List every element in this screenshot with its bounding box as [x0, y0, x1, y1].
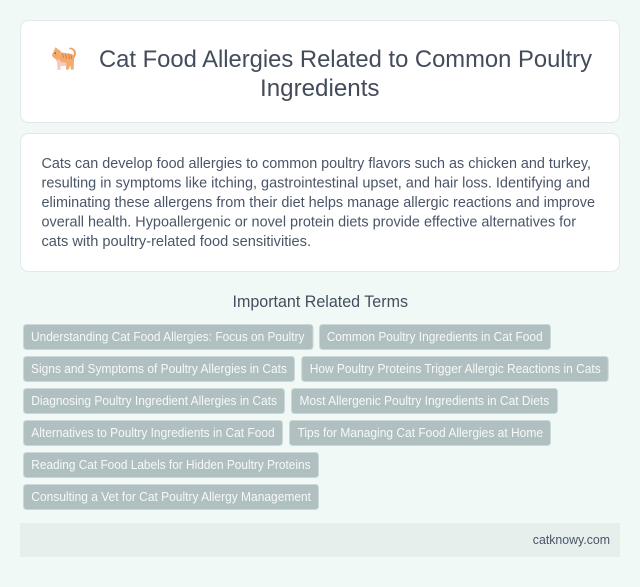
tag [292, 388, 558, 414]
tag: Tips for Managing Cat Food Allergies at Home [298, 426, 543, 440]
tag [320, 324, 550, 350]
text block: description: eliminating these allergens from their diet helps manage allergic reactions and improve [42, 195, 595, 211]
tag: Understanding Cat Food Allergies: Focus on Poultry [31, 330, 305, 344]
title: Cat Food Allergies Related to Common Poultry [99, 46, 593, 73]
tag [24, 356, 294, 382]
footer [20, 523, 620, 557]
tag [24, 324, 313, 350]
tag [24, 388, 284, 414]
tag: How Poultry Proteins Trigger Allergic Reactions in Cats [310, 362, 601, 376]
tag: Most Allergenic Poultry Ingredients in Cat Diets [300, 394, 549, 408]
text block: description: Cats can develop food allergies to common poultry flavors such as chicken and turkey, [42, 156, 591, 172]
panel: related term tags [24, 324, 608, 510]
tag [302, 356, 608, 382]
tag: Diagnosing Poultry Ingredient Allergies in Cats [31, 394, 277, 408]
text block: description: cats with poultry-related food sensitivities. [42, 234, 311, 250]
footer source text: catknowy.com [533, 532, 610, 547]
tag: Reading Cat Food Labels for Hidden Poultry Proteins [31, 458, 311, 472]
tag [24, 484, 318, 510]
tag: Signs and Symptoms of Poultry Allergies in Cats [31, 362, 287, 376]
panel: title card [20, 20, 620, 122]
tag [290, 420, 550, 446]
text block: description: overall health. Hypoallergenic or novel protein diets provide effective alternatives for [42, 214, 576, 230]
tag: Alternatives to Poultry Ingredients in Cat Food [31, 426, 275, 440]
icon: cat [52, 47, 76, 70]
tag: Common Poultry Ingredients in Cat Food [327, 330, 543, 344]
tag: Consulting a Vet for Cat Poultry Allergy Management [31, 490, 311, 504]
title: Ingredients [260, 75, 380, 102]
panel: description [20, 134, 620, 272]
title [99, 46, 593, 102]
heading: important related terms: Important Related Terms [232, 293, 408, 311]
tag [24, 452, 318, 478]
text block: description [42, 156, 595, 250]
tag [24, 420, 282, 446]
text block: description: resulting in symptoms like itching, gastrointestinal upset, and hair loss. Identifying and [42, 176, 590, 192]
